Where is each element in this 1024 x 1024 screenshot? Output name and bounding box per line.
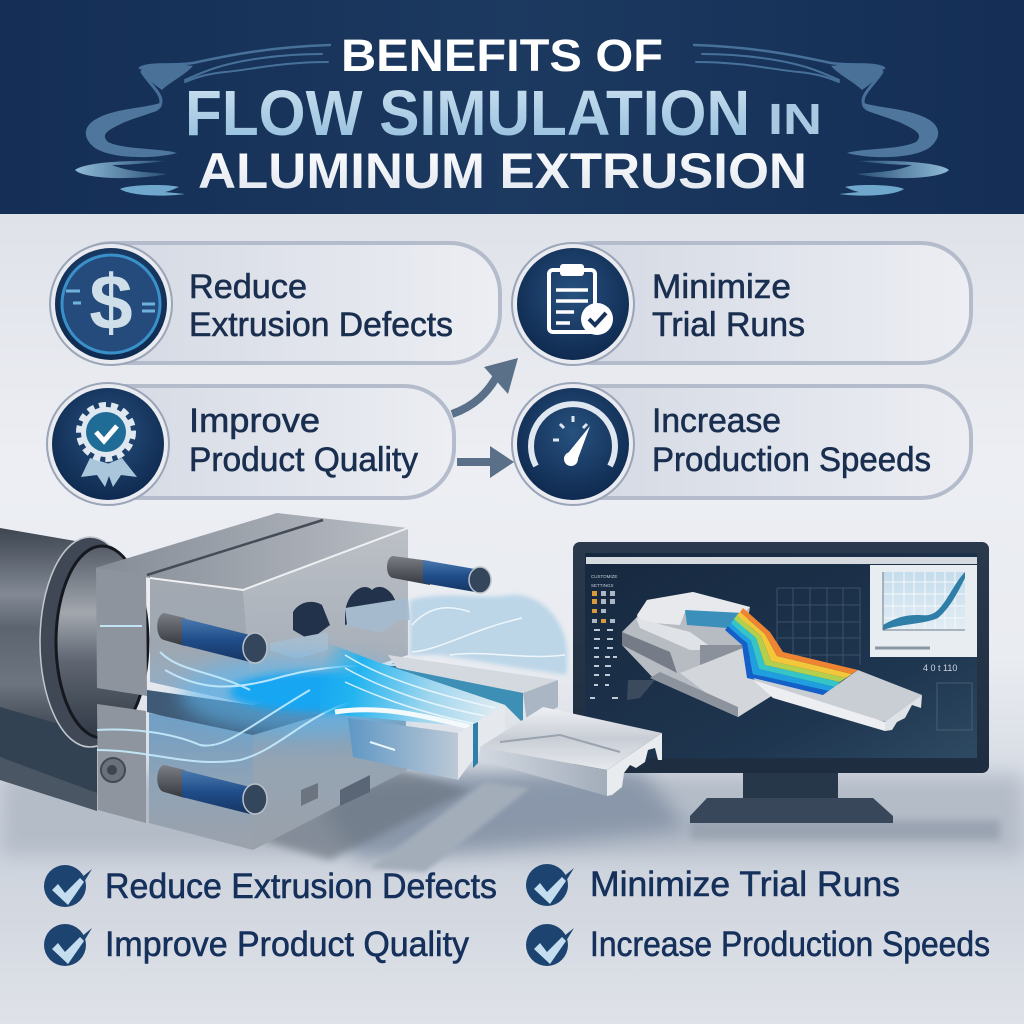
inset chart	[870, 565, 977, 657]
benefit pills	[47, 243, 971, 505]
simulated profile	[753, 670, 922, 731]
cylinder and base	[0, 528, 148, 811]
swirl: right	[694, 45, 949, 196]
pill: reduce extrusion defects: Reduce	[189, 268, 307, 306]
simulated die	[622, 592, 773, 717]
blue flow	[97, 626, 420, 762]
title: ALUMINUM EXTRUSION	[198, 143, 807, 199]
final aluminum profile	[480, 707, 662, 796]
icon: speedometer	[531, 404, 615, 466]
extrusion press illustration	[0, 513, 662, 850]
pill: increase production speeds: Increase	[652, 402, 781, 440]
pin upper right	[387, 556, 491, 593]
upper extruded profile	[380, 655, 558, 723]
factory floor	[0, 770, 1024, 872]
lower extruded profile	[348, 705, 505, 780]
flow surface	[320, 640, 505, 727]
water splash backdrop	[410, 595, 567, 675]
arrow: straight right	[457, 446, 514, 478]
title	[185, 30, 822, 199]
pill: reduce extrusion defects: Extrusion Defects	[189, 306, 453, 344]
die lower block	[149, 690, 407, 850]
pin middle	[157, 613, 267, 663]
pill: improve product quality: Product Quality	[189, 441, 418, 479]
software sidebar	[590, 574, 618, 698]
die top surface	[95, 513, 408, 590]
monitor stand	[690, 772, 893, 823]
software sidebar: SETTINGS	[591, 583, 614, 588]
icon: award badge	[79, 405, 137, 487]
arrow: curved up-right	[452, 358, 518, 414]
pill: improve product quality	[47, 383, 454, 505]
pill: increase production speeds: Production Speeds	[652, 441, 931, 479]
title: FLOW SIMULATION	[185, 77, 750, 149]
pill: reduce extrusion defects: $	[89, 258, 133, 346]
monitor screen	[585, 553, 977, 758]
check item: increase production speeds: Increase Production Speeds	[590, 925, 990, 964]
pill: minimize trial runs: Minimize	[652, 268, 791, 306]
pill: reduce extrusion defects	[50, 243, 500, 365]
checklist	[44, 864, 990, 966]
monitor with simulation	[573, 542, 989, 823]
pill: improve product quality: Improve	[189, 402, 320, 440]
pill: increase production speeds	[512, 383, 971, 505]
status readout: 4 0 t 110	[923, 663, 957, 673]
check item: improve product quality: Improve Product Quality	[105, 925, 469, 964]
icon: clipboard with check	[549, 264, 613, 335]
pill: minimize trial runs	[512, 243, 971, 365]
die tabs	[345, 598, 410, 633]
pill: minimize trial runs: Trial Runs	[652, 306, 805, 344]
check item: reduce extrusion defects: Reduce Extrusion Defects	[105, 867, 497, 906]
header banner	[0, 0, 1024, 214]
title: IN	[768, 95, 822, 144]
title: BENEFITS OF	[341, 30, 663, 81]
die cavities	[293, 587, 397, 640]
rainbow flow results	[725, 608, 858, 700]
software sidebar: CUSTOMIZE	[591, 574, 617, 579]
wireframe grid	[777, 588, 860, 665]
die upper block	[147, 520, 410, 740]
left plate upper	[96, 568, 147, 696]
swirl: left	[75, 45, 330, 196]
left plate lower	[97, 704, 146, 823]
check item: minimize trial runs: Minimize Trial Runs	[590, 865, 900, 904]
monitor bezel	[573, 542, 989, 773]
pin lower	[157, 765, 267, 814]
